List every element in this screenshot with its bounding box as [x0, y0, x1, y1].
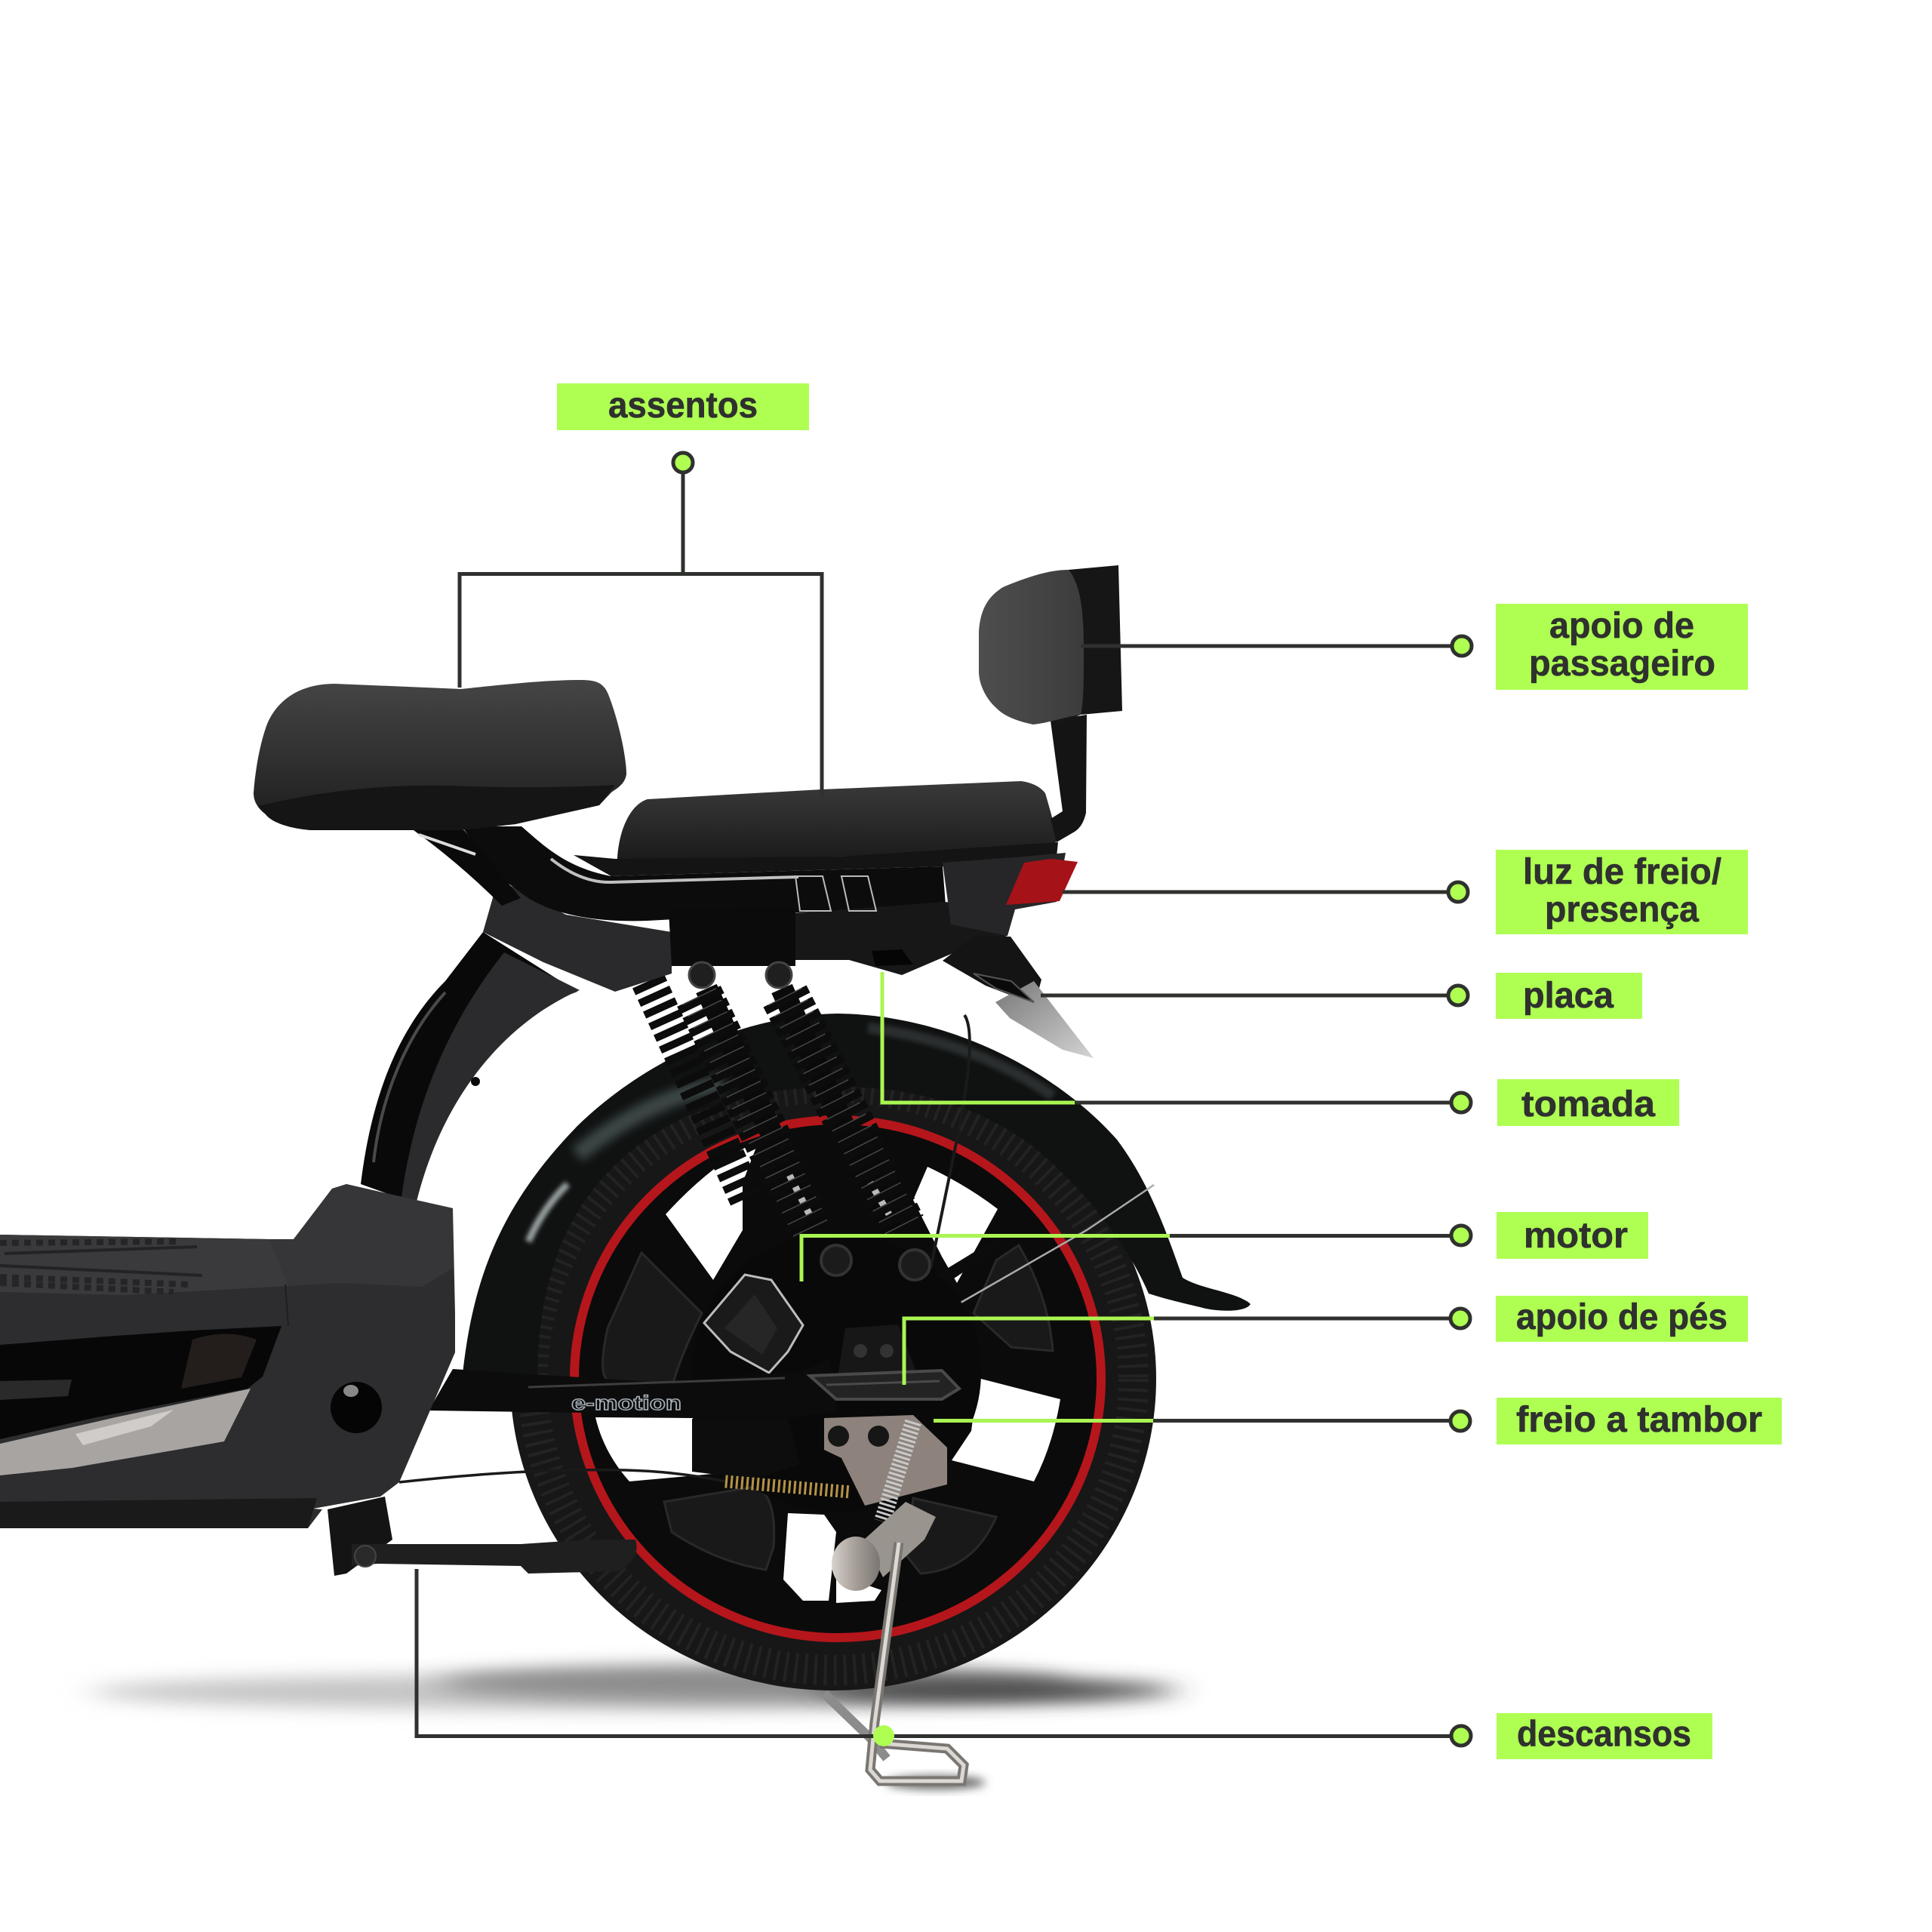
apoio de pés dot [1451, 1309, 1470, 1328]
motor label [1497, 1212, 1648, 1259]
assentos leader [460, 473, 822, 797]
callout: motor [801, 1212, 1648, 1281]
tomada label: tomada [1521, 1084, 1655, 1124]
wheel openings [595, 1140, 1060, 1603]
freio a tambor leader [934, 1419, 1451, 1423]
rear frame tube and underbody [414, 826, 1008, 992]
tomada label [1497, 1079, 1679, 1126]
apoio de passageiro label: passageiro [1529, 644, 1715, 684]
descansos label: descansos [1517, 1715, 1691, 1754]
luz de freio label [1496, 850, 1748, 934]
descansos junction dot [873, 1725, 894, 1746]
tomada leader [882, 972, 1451, 1103]
callout: freio a tambor [934, 1398, 1782, 1444]
apoio de pés label: apoio de pés [1516, 1297, 1727, 1337]
callout: tomada [882, 972, 1679, 1126]
placa label [1496, 973, 1642, 1019]
kickstand [824, 1415, 964, 1781]
descansos leader [417, 1569, 1451, 1736]
side stand [328, 1497, 637, 1576]
rear seat [574, 781, 1058, 876]
tube decal [795, 876, 876, 911]
brake light [943, 853, 1078, 936]
descansos dot [1451, 1726, 1471, 1746]
rear fender [462, 1014, 1251, 1381]
apoio de passageiro dot [1452, 636, 1472, 656]
apoio de passageiro label: apoio de [1549, 606, 1694, 646]
luz de freio dot [1448, 882, 1468, 902]
assentos dot [673, 453, 693, 472]
placa leader [1041, 993, 1448, 998]
passenger backrest [979, 565, 1122, 842]
assentos label [557, 383, 809, 430]
glossy side panel [0, 1326, 281, 1439]
shock absorbers [648, 981, 902, 1230]
luz de freio leader [1063, 891, 1448, 894]
apoio de pés leader [904, 1318, 1451, 1385]
callout: luz de freio/presença [1063, 850, 1748, 934]
tomada dot [1451, 1093, 1471, 1112]
motor label: motor [1524, 1216, 1628, 1256]
motor dot [1451, 1226, 1471, 1245]
ground shadow [91, 1665, 1177, 1789]
scooter illustration [0, 565, 1251, 1789]
callout: descansos [417, 1569, 1712, 1759]
motor leader [801, 1236, 1451, 1281]
brake cable and spring [399, 1470, 851, 1492]
luz de freio label: presença [1545, 890, 1699, 930]
callout: placa [1041, 973, 1642, 1019]
callout: assentos [460, 383, 822, 797]
callout: apoio de passageiro [1081, 604, 1748, 690]
license plate [943, 937, 1094, 1058]
apoio de passageiro label [1496, 604, 1748, 690]
placa label: placa [1523, 976, 1614, 1016]
freio a tambor label: freio a tambor [1516, 1400, 1762, 1440]
wheel spoke pads [603, 1245, 1053, 1574]
seat post arch [361, 932, 580, 1201]
deck and battery housing [0, 1184, 455, 1528]
rear wheel [510, 1067, 1156, 1690]
hub motor [691, 1233, 1004, 1512]
footrest [810, 1324, 959, 1399]
callout: apoio de pés [904, 1296, 1748, 1385]
luz de freio label: luz de freio/ [1523, 852, 1721, 892]
apoio de passageiro leader [1081, 645, 1452, 648]
silver strip [0, 1389, 251, 1475]
freio a tambor dot [1451, 1411, 1470, 1431]
housing hole [331, 1382, 382, 1433]
placa dot [1448, 986, 1468, 1005]
swingarm and body shell [429, 1358, 838, 1479]
assentos label: assentos [608, 386, 758, 426]
brand text: e-motion [571, 1392, 681, 1414]
front seat [254, 680, 626, 830]
